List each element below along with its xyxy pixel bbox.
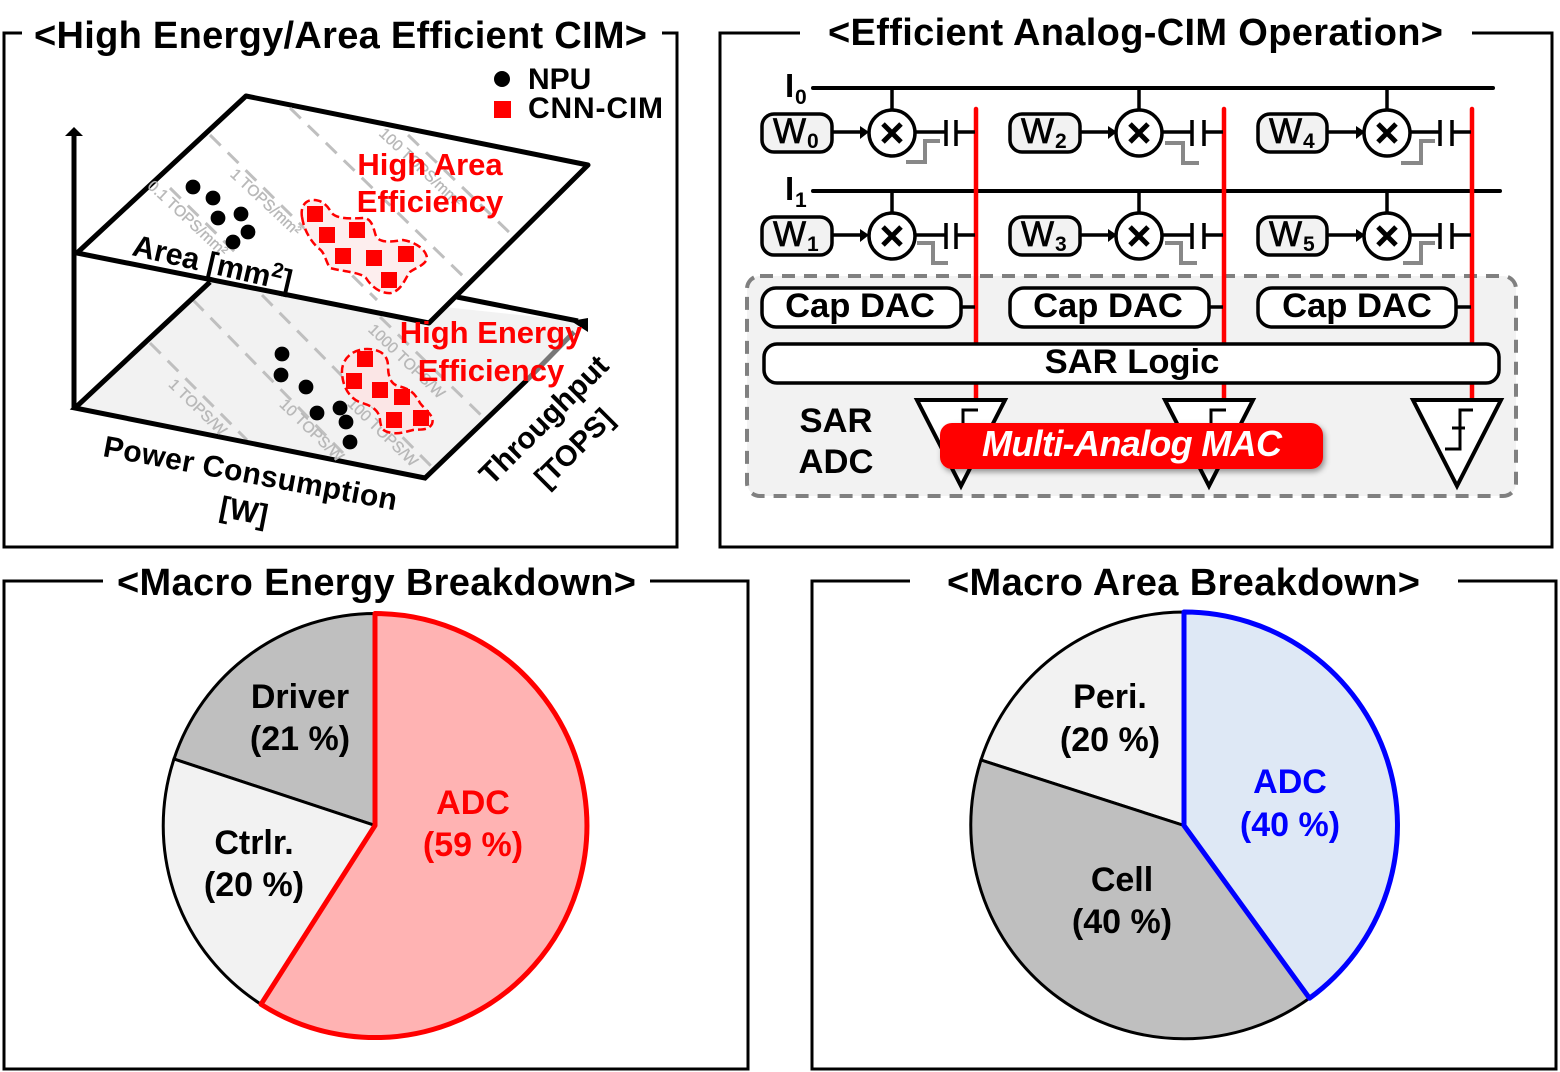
callout: high energy efficiency: Efficiency [418,353,565,388]
label: cell: Cell [1091,861,1153,899]
callout: multi-analog MAC [940,423,1323,469]
slice: cell [971,760,1310,1039]
SAR logic bar: SAR Logic [1045,343,1219,381]
multiplier cell W4 [1258,88,1471,163]
Cap DAC 3 [1258,287,1471,327]
legend [494,63,663,125]
slice: peripheral [981,612,1184,826]
label: peripheral [1060,678,1160,759]
axis label: area: ] [278,263,295,298]
multiplier cell W4: 4 [1303,130,1315,153]
multiplier cell W5: W [1269,215,1302,254]
Cap DAC 1: Cap DAC [785,287,935,325]
lower plane efficiency labels: 100 TOPS/W [344,395,421,471]
lower plane efficiency labels: 1 TOPS/W [165,376,230,440]
callout: high energy efficiency [400,315,583,388]
panel: efficient analog-CIM operation [720,12,1552,547]
SAR logic bar [764,343,1499,383]
label: ADC: (40 %) [1240,806,1340,844]
slice: ADC [261,614,587,1038]
label: ADC [423,784,523,864]
Cap DAC 2 [1010,287,1223,327]
label: driver: (21 %) [250,720,350,758]
legend: NPU [528,63,591,96]
callout: high area efficiency [357,147,504,219]
label: ADC [1240,763,1340,844]
label: controller: (20 %) [204,866,304,904]
Cap DAC 2: Cap DAC [1033,287,1183,325]
callout: high energy efficiency: High Energy [400,315,583,350]
pie chart: energy [163,614,587,1038]
SAR ADC label: ADC [799,443,873,481]
input line I0: 0 [795,86,807,109]
label: driver [250,678,350,758]
heading: macro energy breakdown: <Macro Energy Breakdown> [117,562,636,604]
callout: multi-analog MAC: Multi-Analog MAC [982,423,1283,464]
label: cell: (40 %) [1072,903,1172,941]
multiplier cell W5: 5 [1303,233,1315,256]
lower plane CNN-CIM cluster [342,349,433,433]
axis label: area: 2 [269,258,286,283]
input line I1: I [785,170,794,207]
multiplier cell W0: W [773,112,806,151]
multiplier cell W0: 0 [807,130,819,153]
heading: macro area breakdown: <Macro Area Breakdown> [947,562,1420,604]
label: peripheral: (20 %) [1060,721,1160,759]
slice: driver [174,614,375,826]
label: ADC: ADC [1253,763,1327,801]
comparator 3 [1413,400,1501,486]
label: driver: Driver [251,678,349,716]
vertical area axis arrow [65,127,83,410]
axis label: throughput: Throughput [473,349,615,491]
lower plane efficiency labels: 1000 TOPS/W [365,321,448,403]
label: ADC: ADC [436,784,510,822]
label: controller: Ctrlr. [214,824,294,862]
multiplier cell W3 [1010,191,1223,263]
SAR ADC label: SAR [799,402,873,440]
throughput axis arrow [527,318,588,380]
lower plane efficiency labels [165,321,448,471]
multiplier cell W0 [762,88,975,162]
multiplier cell W2: 2 [1055,130,1067,153]
lower plane NPU points [274,347,357,449]
axis label: area: Area [mm [129,229,274,293]
panel frame: top right [720,33,1552,547]
slice: controller [163,759,375,1004]
upper plane efficiency labels: 0.1 TOPS/mm² [144,177,231,260]
panel: high energy/area efficient CIM [4,15,677,547]
legend: CNN-CIM [528,92,663,125]
multiplier cell W2 [1010,88,1223,163]
Cap DAC 3: Cap DAC [1282,287,1432,325]
multiplier cell W5 [1258,191,1471,263]
upper plane efficiency labels: 1 TOPS/mm² [227,166,304,240]
callout: high area efficiency: High Area [357,147,503,182]
heading: efficient analog-CIM operation: <Efficient Analog-CIM Operation> [828,12,1443,54]
panel: macro area breakdown [812,562,1556,1069]
label: controller [204,824,304,904]
lower plane efficiency labels: 10 TOPS/W [276,396,347,466]
multiplier cell W1 [762,191,975,263]
panel frame: bottom left [4,581,748,1069]
lower plane: energy efficiency [75,282,585,478]
label: peripheral: Peri. [1073,678,1147,716]
label: ADC: (59 %) [423,826,523,864]
red bit lines [976,109,1472,400]
comparator 1 [917,400,1005,486]
multiplier cell W1: W [773,215,806,254]
input line I0 [785,67,1493,109]
multiplier cell W4: W [1269,112,1302,151]
upper plane efficiency labels: 100 TOPS/mm² [375,125,465,210]
callout: high area efficiency: Efficiency [357,184,504,219]
axis label: power consumption: Power Consumption [101,430,400,517]
pie chart: area [971,612,1397,1039]
SAR ADC label [799,402,873,481]
upper plane NPU points [186,180,255,249]
multiplier cell W2: W [1021,112,1054,151]
input line I1 [785,170,1500,212]
panel frame: bottom right [812,581,1556,1069]
upper plane: area efficiency [77,96,588,323]
slice: ADC [1184,612,1397,998]
upper plane CNN-CIM cluster [302,200,427,293]
SAR ADC dashed block [747,276,1516,496]
Cap DAC 1 [762,287,975,327]
input line I1: 1 [795,189,807,212]
comparator 2 [1165,400,1253,486]
axis label: TOPS unit: [TOPS] [529,403,621,495]
multiplier cell W1: 1 [807,233,819,256]
panel: macro energy breakdown [4,562,748,1069]
heading: high energy/area efficient CIM: <High Energy/Area Efficient CIM> [34,15,647,57]
input line I0: I [785,67,794,104]
label: cell [1072,861,1172,941]
upper plane efficiency labels [144,125,465,260]
axis label: watt unit: [W] [217,491,271,532]
panel frame: top left [4,33,677,547]
multiplier cell W3: 3 [1055,233,1067,256]
multiplier cell W3: W [1021,215,1054,254]
